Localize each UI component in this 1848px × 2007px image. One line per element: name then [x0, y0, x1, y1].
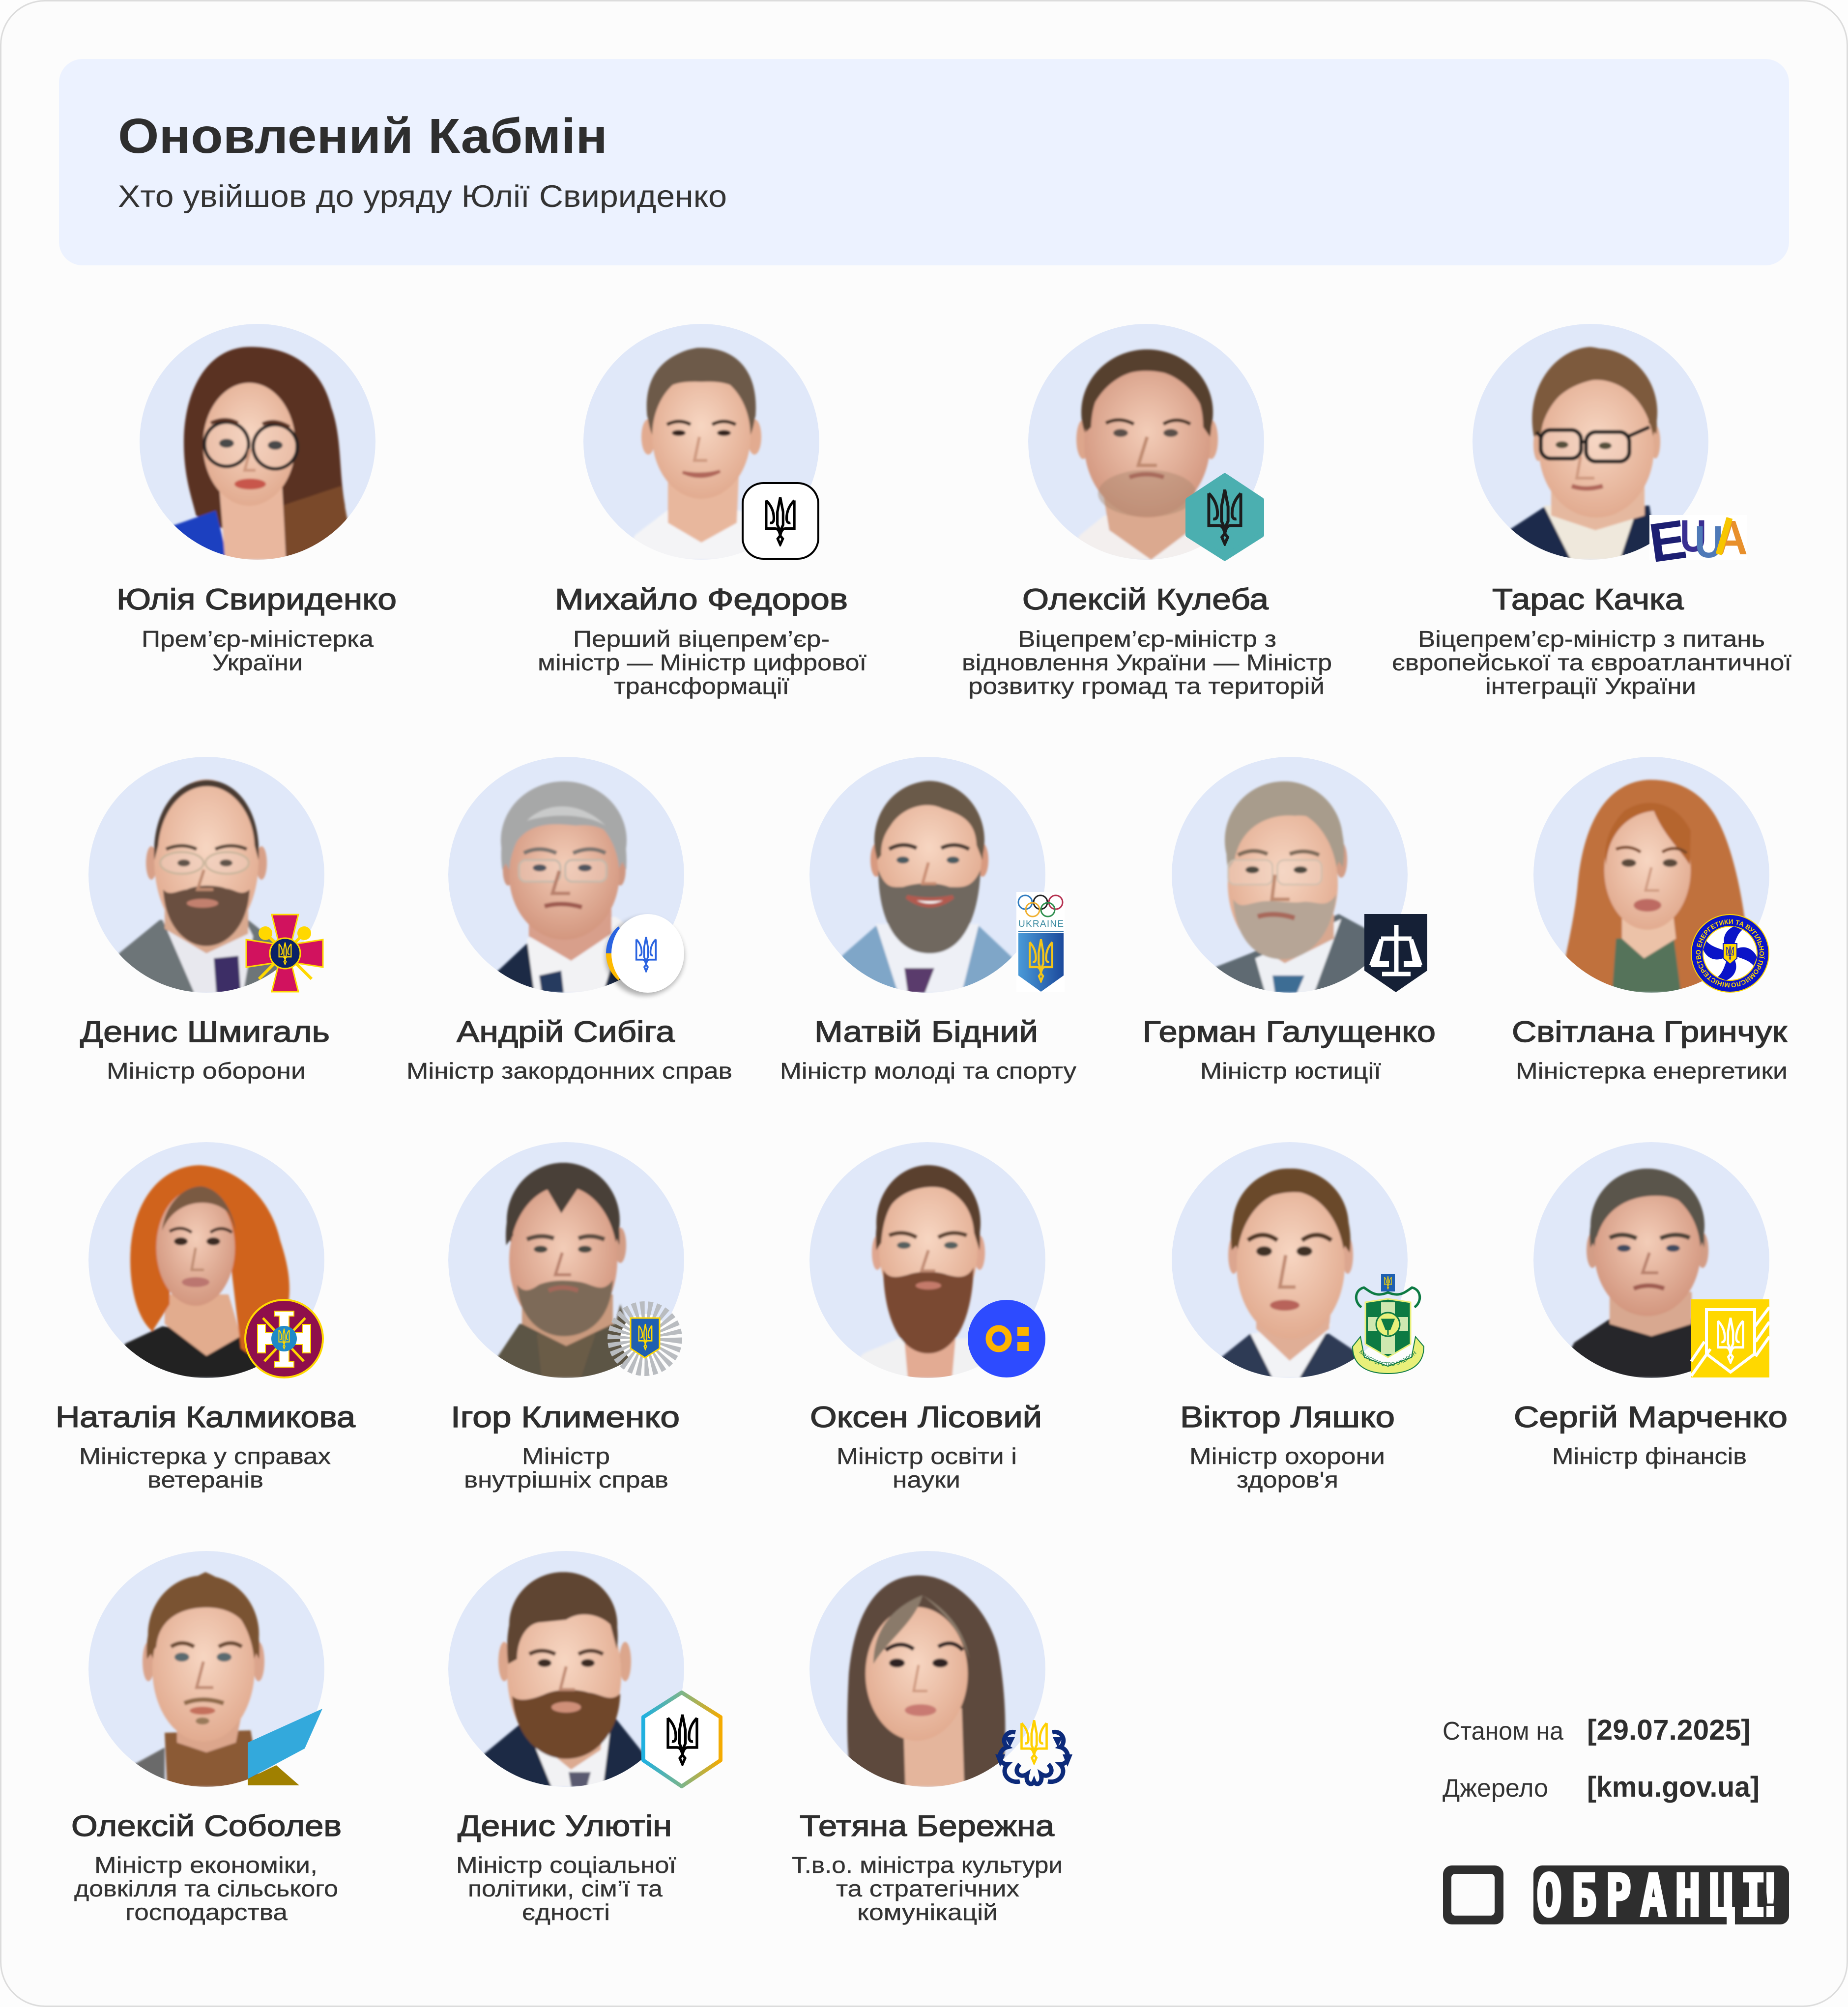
person: Сергій Марченко [1514, 1142, 1788, 1469]
portrait [88, 1551, 324, 1787]
portrait [448, 1551, 684, 1787]
name: Михайло Федоров [555, 583, 848, 616]
portrait [448, 1142, 684, 1378]
icon: Мінекономіки badge [248, 1709, 322, 1785]
person: Тарас Качка [1392, 324, 1791, 699]
icon: Олімпійський комітет [1016, 892, 1065, 992]
name: Юлія Свириденко [116, 583, 397, 616]
name: Оксен Лісовий [810, 1401, 1042, 1434]
person: Наталія Калмикова [56, 1142, 356, 1492]
name: Тетяна Бережна [800, 1809, 1055, 1842]
name: Тарас Качка [1492, 583, 1684, 616]
icon: logo square [1443, 1865, 1503, 1924]
footer: source: Джерело [1443, 1774, 1548, 1803]
name: Денис Улютін [458, 1809, 672, 1842]
portrait [88, 757, 324, 993]
header panel [59, 59, 1789, 265]
role: Прем’єр-міністерка [142, 626, 374, 652]
name: Наталія Калмикова [56, 1401, 356, 1434]
role: Міністр фінансів [1552, 1443, 1747, 1469]
icon: Міненерго seal [1691, 914, 1769, 993]
role: Віцепрем’єр-міністр з питань [1418, 626, 1765, 652]
person: Олексій Кулеба [962, 324, 1332, 699]
role: комунікацій [857, 1899, 998, 1925]
role: політики, сім’ї та [468, 1876, 663, 1901]
name: Світлана Гринчук [1512, 1015, 1788, 1048]
name: Сергій Марченко [1514, 1401, 1788, 1434]
role [792, 1852, 1063, 1925]
person: Денис Шмигаль [80, 757, 330, 1084]
role: Міністерка енергетики [1516, 1058, 1788, 1084]
role: та стратегічних [836, 1876, 1019, 1901]
icon: EUA logo: A [1715, 511, 1748, 565]
icon: EUA logo [1646, 508, 1748, 574]
role: Міністр закордонних справ [406, 1058, 732, 1084]
portrait [448, 757, 684, 993]
role [1392, 626, 1791, 699]
role: Міністр [522, 1443, 610, 1469]
icon: Мінветеранів emblem [245, 1300, 323, 1377]
portrait [1028, 324, 1264, 560]
role: Міністр освіти і [837, 1443, 1017, 1469]
role [538, 626, 866, 699]
icon: Міноборони cross [246, 915, 323, 992]
role: відновлення України — Міністр [962, 650, 1332, 675]
icon: EUA logo: U [1680, 511, 1706, 561]
footer: date: [29.07.2025] [1587, 1714, 1751, 1746]
icon: Мін'юст shield [1364, 914, 1427, 992]
person: Тетяна Бережна [792, 1551, 1072, 1925]
role: Перший віцепрем’єр- [573, 626, 830, 652]
person: Оксен Лісовий [809, 1142, 1045, 1492]
person: Олексій Соболев [71, 1551, 342, 1925]
icon: Мінкульт ornament [995, 1720, 1072, 1784]
name: Денис Шмигаль [80, 1015, 330, 1048]
role: здоров'я [1237, 1467, 1338, 1492]
person: Михайло Федоров [538, 324, 866, 699]
role: внутрішніх справ [464, 1467, 668, 1492]
footer: source [1443, 1771, 1760, 1803]
person: Матвій Бідний [780, 757, 1076, 1084]
portrait [809, 1142, 1045, 1378]
portrait [1533, 1142, 1769, 1378]
person: Ігор Клименко [448, 1142, 684, 1492]
name: Ігор Клименко [451, 1401, 680, 1434]
icon: МВС star [620, 1314, 669, 1363]
icon: Мінфін badge [1691, 1299, 1769, 1377]
portrait [809, 757, 1045, 993]
icon: EUA logo: E [1646, 508, 1690, 574]
role [464, 1443, 668, 1492]
portrait [1172, 1142, 1408, 1378]
logo wordmark: ОБРАНЦІ! [1536, 1863, 1783, 1929]
role: розвитку громад та територій [968, 673, 1325, 699]
role: Т.в.о. міністра культури [792, 1852, 1063, 1878]
role: Віцепрем’єр-міністр з [1018, 626, 1276, 652]
person: Герман Галущенко [1143, 757, 1436, 1084]
portrait [809, 1551, 1045, 1787]
name: Віктор Ляшко [1180, 1401, 1395, 1434]
role [74, 1852, 338, 1925]
name: Олексій Кулеба [1022, 583, 1269, 616]
icon: Мінсоцполітики hexagon [643, 1692, 721, 1786]
role: Міністр молоді та спорту [780, 1058, 1076, 1084]
portrait [140, 324, 375, 560]
icon: Олімпійський комітет: UKRAINE [1018, 919, 1064, 929]
role: Міністерка у справах [79, 1443, 331, 1469]
portrait [583, 324, 819, 560]
person: Денис Улютін [448, 1551, 721, 1925]
role: науки [893, 1467, 960, 1492]
role [79, 1443, 331, 1492]
role [962, 626, 1332, 699]
name: Герман Галущенко [1143, 1015, 1436, 1048]
footer: source: [kmu.gov.ua] [1587, 1771, 1760, 1803]
subtitle: Хто увійшов до уряду Юлії Свириденко [118, 179, 727, 214]
role: довкілля та сільського [74, 1876, 338, 1901]
name: Матвій Бідний [814, 1015, 1038, 1048]
role: європейської та євроатлантичної [1392, 650, 1791, 675]
role: ветеранів [147, 1467, 263, 1492]
portrait [88, 1142, 324, 1378]
role [837, 1443, 1017, 1492]
icon: badge Мінцифри [743, 483, 818, 559]
person: Андрій Сибіга [406, 757, 732, 1084]
role: Міністр юстиції [1200, 1058, 1381, 1084]
portrait [1533, 757, 1769, 993]
role: Міністр оборони [107, 1058, 306, 1084]
role: господарства [125, 1899, 288, 1925]
role: трансформації [614, 673, 789, 699]
person: Юлія Свириденко [116, 324, 397, 675]
role: Міністр соціальної [456, 1852, 676, 1878]
icon: teal shield [1188, 476, 1261, 558]
person: Світлана Гринчук [1512, 757, 1788, 1084]
role: інтеграції України [1485, 673, 1696, 699]
icon: МОЗ emblem: МІНІСТЕРСТВО ОХОРОНИ ЗДОРОВ'Я УКРАЇНИ [1359, 1350, 1416, 1366]
icon: МОН logo [968, 1300, 1045, 1377]
role: України [212, 650, 303, 675]
title: Оновлений Кабмін [118, 109, 607, 164]
portrait [1473, 324, 1708, 560]
footer: date: Станом на [1443, 1717, 1563, 1746]
role: Міністр економіки, [94, 1852, 318, 1878]
role: Міністр охорони [1189, 1443, 1385, 1469]
role: міністр — Міністр цифрової [538, 650, 866, 675]
icon: EUA logo: U [1695, 517, 1723, 567]
footer: date [1443, 1714, 1751, 1746]
role [1189, 1443, 1385, 1492]
icon: МЗС badge [606, 914, 684, 996]
name: Андрій Сибіга [457, 1015, 675, 1048]
portrait [1172, 757, 1408, 993]
role [456, 1852, 676, 1925]
icon: Міненерго seal: МІНІСТЕРСТВО ЕНЕРГЕТИКИ ТА ВУГІЛЬНОЇ ПРОМИСЛОВОСТІ УКРАЇНИ [1696, 919, 1765, 988]
person: Віктор Ляшко [1172, 1142, 1424, 1492]
name: Олексій Соболев [71, 1809, 342, 1842]
role [142, 626, 374, 675]
role: єдності [522, 1899, 610, 1925]
